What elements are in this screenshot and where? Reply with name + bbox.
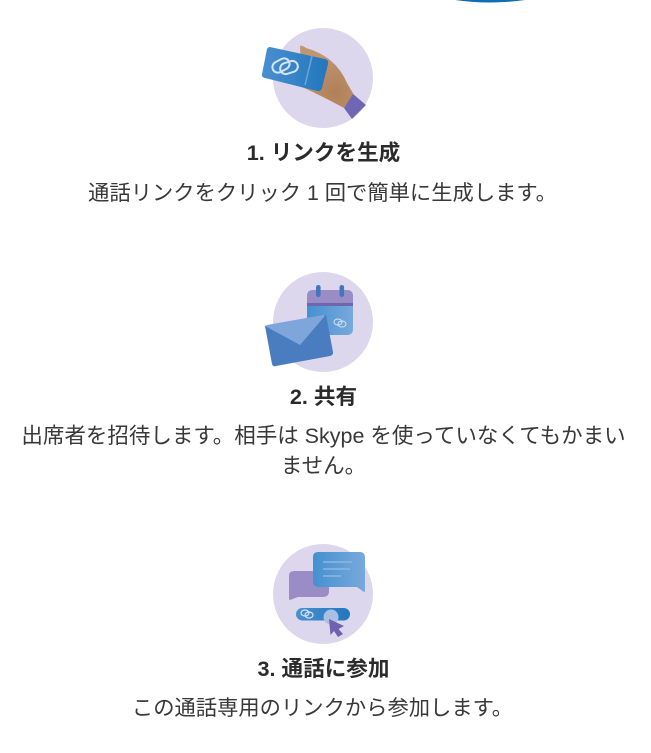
text 3: この通話専用のリンクから参加します。 (132, 696, 513, 720)
text 1: 通話リンクをクリック 1 回で簡単に生成します。 (88, 181, 557, 205)
heading 2: 2. 共有 (290, 384, 357, 409)
text 2 (21, 424, 626, 478)
icon: link glyph (270, 56, 299, 76)
icon: hand holding link card (262, 28, 373, 128)
top edge arc (455, 0, 525, 2)
heading 1: 1. リンクを生成 (247, 140, 400, 165)
heading 3: 3. 通話に参加 (258, 656, 389, 681)
text 2: 出席者を招待します。相手は Skype を使っていなくてもかまい (21, 424, 626, 448)
icon: chat bubbles and link cursor (273, 544, 373, 644)
icon: envelope and calendar (265, 272, 373, 372)
text 2: ません。 (281, 454, 366, 478)
